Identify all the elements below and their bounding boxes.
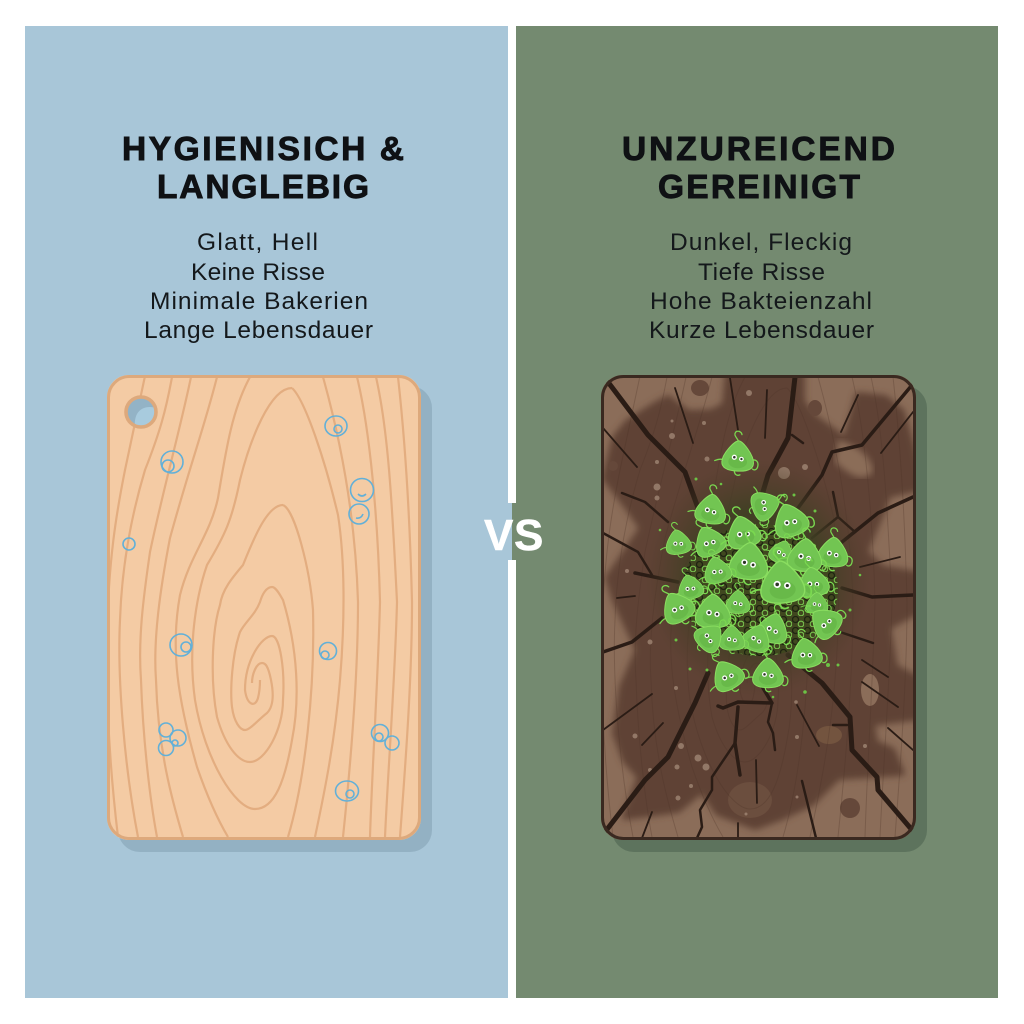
faint wood grain xyxy=(602,376,907,837)
dirty cracked cutting board xyxy=(601,372,927,852)
text block: poorly cleaned properties xyxy=(649,229,874,344)
text block: hygienic properties: Minimale Bakerien xyxy=(150,288,368,315)
dark stain xyxy=(605,372,920,827)
heading: poorly cleaned xyxy=(622,131,895,206)
text block: hygienic properties: Lange Lebensdauer xyxy=(144,317,373,344)
colony shadow and mesh xyxy=(646,460,870,696)
heading: hygienic: LANGLEBIG xyxy=(157,169,369,206)
clean cutting board xyxy=(107,375,432,852)
panel: poorly cleaned background xyxy=(512,26,998,998)
heading: hygienic xyxy=(122,131,404,206)
heading: hygienic: HYGIENISICH & xyxy=(122,131,404,168)
text block: hygienic properties: Glatt, Hell xyxy=(197,229,318,256)
heading: poorly cleaned: GEREINIGT xyxy=(658,169,861,206)
bacteria colony xyxy=(645,430,870,702)
cracks xyxy=(603,377,913,840)
stain details xyxy=(691,380,879,818)
green speckles xyxy=(659,478,861,698)
VS label: V xyxy=(484,511,514,560)
text block: poorly cleaned properties: Hohe Bakteienzahl xyxy=(650,288,872,315)
panel: hygienic background xyxy=(25,26,512,998)
text block: poorly cleaned properties: Tiefe Risse xyxy=(698,259,825,286)
heading: poorly cleaned: UNZUREICEND xyxy=(622,131,895,168)
text block: hygienic properties: Keine Risse xyxy=(191,259,325,286)
center divider xyxy=(508,26,516,998)
text block: hygienic properties xyxy=(144,229,373,344)
bacteria xyxy=(645,430,855,702)
board hanging hole xyxy=(126,397,156,427)
text block: poorly cleaned properties: Dunkel, Fleckig xyxy=(670,229,852,256)
small spots xyxy=(625,390,867,816)
minimal bacteria rings xyxy=(123,416,399,801)
VS label: S xyxy=(514,511,543,560)
wood grain xyxy=(107,376,412,837)
text block: poorly cleaned properties: Kurze Lebensdauer xyxy=(649,317,874,344)
VS label xyxy=(484,511,543,560)
